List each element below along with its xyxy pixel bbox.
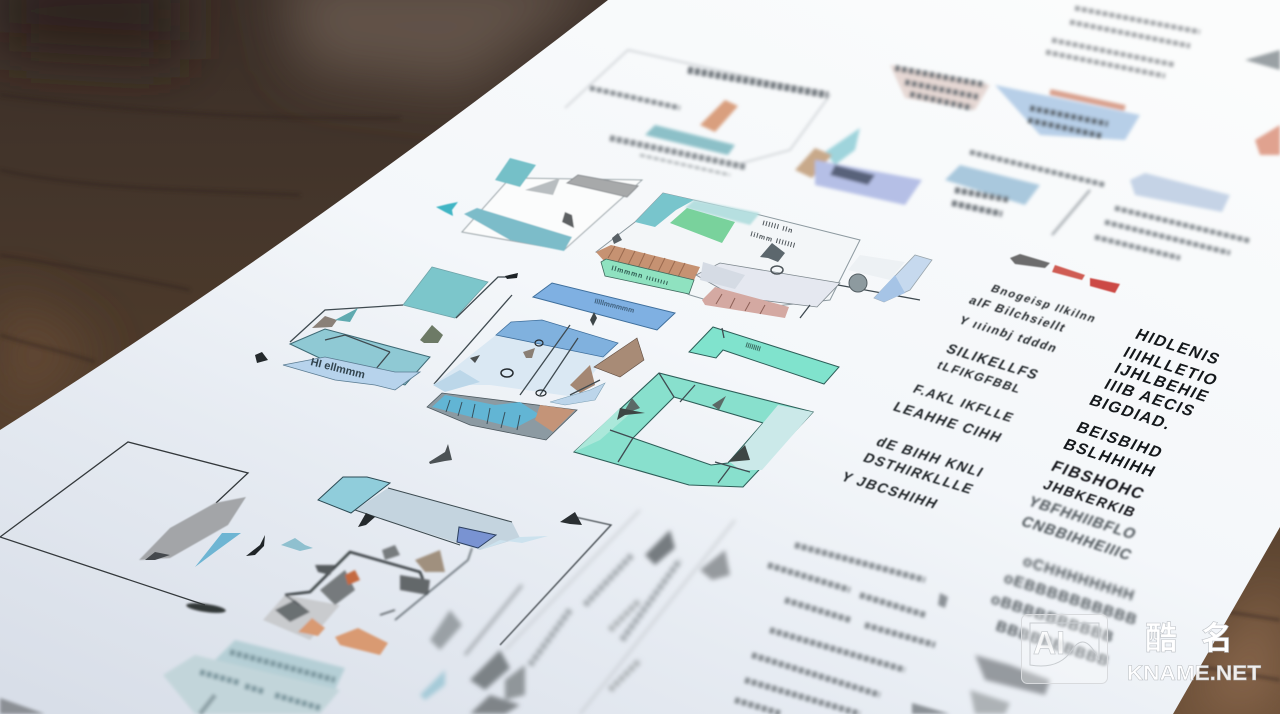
- text block: middle column: DSTHIRKLLLE: [860, 451, 977, 498]
- text block: right column: oBBBBBBBBBB: [989, 591, 1116, 647]
- text block: middle column: Y ııiınbj tdddn: [956, 314, 1061, 355]
- text block: right column: oEBBBBBBBBBB: [1002, 570, 1140, 629]
- dark blot: [186, 601, 226, 615]
- text block: right column: YBFHHIIBFLO: [1025, 494, 1140, 543]
- panel: green frame diagram: llllllll: [744, 342, 761, 353]
- text block: middle column: alF Bilchsiellt: [966, 294, 1069, 335]
- panel: center pictorial diagram: [427, 283, 675, 440]
- panel: green frame diagram: [574, 327, 839, 487]
- text block: middle column: LEAHHE CIHH: [890, 400, 1006, 446]
- text block: middle column: SILIKELLFS: [943, 342, 1042, 383]
- panel: bottom teal arrow diagram: [318, 477, 548, 550]
- text block: right column: HIDLENIS: [1132, 326, 1224, 369]
- diagram background: [596, 193, 860, 310]
- blue caption ribbon: [283, 357, 420, 390]
- support lines: [800, 285, 920, 318]
- text block: right column: IIIHLLETIO: [1120, 344, 1222, 390]
- blue shard: [195, 533, 241, 567]
- light part of frame: [730, 405, 813, 470]
- brown hatch: [596, 245, 700, 280]
- panel: top-left teal diagram: [436, 158, 642, 251]
- small figures: [501, 369, 513, 377]
- text block: right column: BSLHHIHH: [1060, 436, 1160, 481]
- grey panel: [696, 263, 840, 307]
- pale area: [433, 335, 615, 397]
- grey wedge: [139, 497, 246, 560]
- text block: middle column: dE BIHH KNLI: [873, 435, 987, 481]
- small icons: [312, 316, 337, 328]
- icon: teal star: [436, 202, 458, 216]
- text block: lower notes: [735, 545, 950, 714]
- watermark: AI badge: AI: [1033, 625, 1065, 661]
- frame tag icons: [622, 398, 640, 415]
- blue bar label: [533, 283, 675, 330]
- watermark: brand name: KNAME.NET: [1127, 662, 1261, 685]
- divider line: [434, 295, 512, 384]
- text block: right column: BBBBBBBBBB: [994, 618, 1112, 670]
- teal tab: [318, 477, 390, 513]
- blurred dark note: [975, 655, 1050, 695]
- connector line with tag: [500, 512, 611, 645]
- panel: top-center diagram: Illlll Iln: [761, 220, 794, 235]
- pale blue blob: [281, 538, 313, 551]
- brown rock: [594, 338, 644, 377]
- watermark: brand name: 名: [1201, 620, 1233, 656]
- icon: small bird shape: [429, 444, 452, 464]
- panel: small teal and lavender chart: [795, 128, 1040, 214]
- gauge icon: [849, 274, 867, 292]
- watermark: AI badge: [1022, 614, 1108, 684]
- blue cylinder: [874, 255, 932, 302]
- text block: right column: BEISBIHD: [1073, 419, 1167, 462]
- teal corner: [635, 193, 694, 227]
- panel: blurred bottom teal captions: [163, 640, 345, 714]
- blue band: [496, 320, 618, 357]
- text block: right column: [970, 326, 1224, 714]
- bottom map strip: [427, 393, 577, 440]
- panel: top-center diagram: lilmm Illllll: [749, 231, 797, 250]
- blue tab: [457, 527, 496, 548]
- chart bars: [567, 175, 638, 197]
- left node icon: [612, 233, 622, 244]
- text block: middle column: F.AKL IKFLLE: [910, 382, 1018, 425]
- text block: right column: oCHHHHHHHH: [1021, 553, 1137, 605]
- dark figure: [760, 243, 785, 262]
- green caption: [601, 259, 694, 294]
- text block: right column: FIBSHOHC: [1048, 458, 1149, 503]
- panel: center pictorial diagram: Illllmmmmm: [594, 298, 635, 315]
- text block: middle column: Y JBCSHIHH: [838, 470, 942, 513]
- grey arrow band: [355, 488, 520, 550]
- red strip: [702, 287, 789, 318]
- text block: right column: CNBBIHHEIIIC: [1018, 514, 1135, 564]
- pale blue blob: [550, 383, 605, 405]
- watermark: brand name: 酷: [1145, 620, 1177, 656]
- text block: right column: IJHLBEHIE: [1111, 360, 1213, 406]
- text block: right column: BIGDIAD.: [1086, 392, 1176, 434]
- top blurred panels: [565, 8, 1280, 258]
- pale arrowhead: [480, 536, 548, 550]
- panel: left teal diagram: [255, 267, 518, 390]
- dark hook: [246, 535, 265, 556]
- frame body: [574, 373, 813, 487]
- dark tag: [358, 513, 375, 527]
- panel: bottom-left outlined box: [0, 442, 313, 615]
- teal square: [403, 267, 488, 318]
- panel: bottom map sketch: [263, 545, 472, 655]
- text block: right column: JHBKERKIB: [1040, 477, 1140, 520]
- watermark: brand name: [1127, 620, 1261, 685]
- panel: upper left chart: [565, 50, 830, 175]
- paper shadow corner: [0, 698, 45, 714]
- teal band: [290, 329, 430, 385]
- frame lines: [520, 325, 600, 395]
- panel: blurred bottom middle notes: [420, 510, 735, 714]
- panel: upper right charts: [890, 8, 1280, 155]
- green label: [670, 208, 735, 243]
- text block: middle column: Bnogeisp Ilkilnn: [988, 283, 1099, 325]
- panel: top-center diagram: [596, 193, 932, 318]
- panel: left teal diagram: HI ellmmm: [309, 356, 366, 381]
- text block: middle column: tLFIKGFBBL: [934, 359, 1025, 396]
- text block: right column: IIIB AECIS: [1101, 376, 1199, 420]
- red heading squiggle: [1010, 254, 1120, 293]
- text block: middle column: [838, 283, 1099, 513]
- green bar label: [689, 327, 839, 384]
- panel: text block upper right: [970, 152, 1250, 258]
- arrow line to teal square: [290, 277, 516, 342]
- panel: top-center diagram: Ilmmmn ıııııııı: [610, 265, 670, 287]
